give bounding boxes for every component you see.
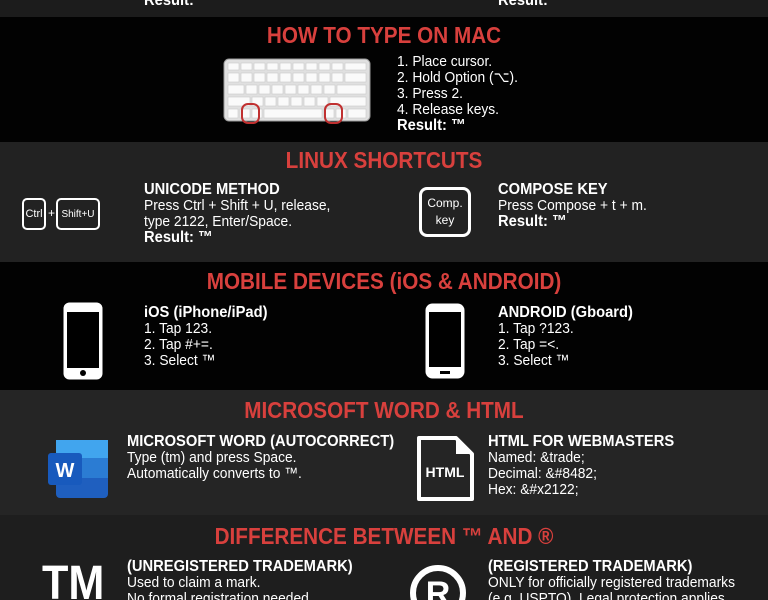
icon: ctrl shift u keys <box>22 198 100 230</box>
band: previous section <box>0 0 768 17</box>
band: mobile <box>0 262 768 390</box>
heading: difference: DIFFERENCE BETWEEN ™ AND ® <box>215 523 553 549</box>
text: compose key <box>498 181 647 230</box>
text: unregistered <box>127 558 353 600</box>
icon: ctrl shift u keys: + <box>48 206 55 220</box>
text: ios <box>144 304 267 369</box>
icon: iphone <box>64 302 102 380</box>
text: android: ANDROID (Gboard) <box>498 304 633 321</box>
text: android: 2. Tap =<. <box>498 336 559 353</box>
text: android: 1. Tap ?123. <box>498 320 574 337</box>
band: word html <box>0 390 768 515</box>
heading: mac: HOW TO TYPE ON MAC <box>267 22 501 48</box>
band: difference <box>0 515 768 600</box>
text: mac steps: 3. Press 2. <box>397 85 463 102</box>
text: unicode method <box>144 181 330 246</box>
band: linux <box>0 142 768 262</box>
heading: word html: MICROSOFT WORD & HTML <box>244 397 524 423</box>
icon: word: W <box>56 460 75 482</box>
text: mac steps: Result: ™ <box>397 117 466 134</box>
text: html entities: Named: &trade; <box>488 449 585 466</box>
icon: ctrl shift u keys: Ctrl <box>25 208 43 220</box>
icon: compose key: Comp. <box>427 196 463 210</box>
text: word autocorrect <box>127 433 394 482</box>
text: registered: ONLY for officially registered trademarks <box>488 574 735 591</box>
text: unicode method: type 2122, Enter/Space. <box>144 213 292 230</box>
icon: R circle <box>410 565 466 600</box>
heading: mobile: MOBILE DEVICES (iOS & ANDROID) <box>207 268 561 294</box>
text: html entities: HTML FOR WEBMASTERS <box>488 433 674 450</box>
text: unregistered: (UNREGISTERED TRADEMARK) <box>127 558 353 575</box>
icon: html file: HTML <box>426 464 465 480</box>
text: ios: 3. Select ™ <box>144 352 215 369</box>
text: mac steps: 1. Place cursor. <box>397 53 492 70</box>
heading: linux: LINUX SHORTCUTS <box>286 147 482 173</box>
text: word autocorrect: Type (tm) and press Space. <box>127 449 297 466</box>
text: mac steps: 2. Hold Option (⌥). <box>397 69 518 86</box>
text: html entities: Hex: &#x2122; <box>488 481 579 498</box>
icon: android phone <box>426 304 464 378</box>
icon: ctrl shift u keys: Shift+U <box>61 208 95 220</box>
text: compose key: Press Compose + t + m. <box>498 197 647 214</box>
text: ios: 2. Tap #+=. <box>144 336 213 353</box>
text: registered <box>488 558 735 600</box>
text: unregistered: Used to claim a mark. <box>127 574 260 591</box>
text: mac steps <box>397 53 518 134</box>
text: ios: 1. Tap 123. <box>144 320 212 337</box>
text: compose key: COMPOSE KEY <box>498 181 608 198</box>
text: android: 3. Select ™ <box>498 352 569 369</box>
text: word autocorrect: Automatically converts to ™. <box>127 465 302 482</box>
text: ios: iOS (iPhone/iPad) <box>144 304 267 321</box>
band: mac <box>0 17 768 142</box>
icon: word <box>48 440 108 498</box>
text: unicode method: Press Ctrl + Shift + U, release, <box>144 197 330 214</box>
text: android <box>498 304 633 369</box>
text: registered: (REGISTERED TRADEMARK) <box>488 558 692 575</box>
text: word autocorrect: MICROSOFT WORD (AUTOCORRECT) <box>127 433 394 450</box>
text: compose key: Result: ™ <box>498 213 567 230</box>
icon: compose key: key <box>436 213 454 227</box>
text: html entities <box>488 433 674 498</box>
text: html entities: Decimal: &#8482; <box>488 465 597 482</box>
text: unicode method: UNICODE METHOD <box>144 181 280 198</box>
text: mac steps: 4. Release keys. <box>397 101 499 118</box>
icon: keyboard <box>224 58 370 124</box>
icon: html file <box>417 436 474 501</box>
icon: compose key <box>419 187 471 237</box>
text: unicode method: Result: ™ <box>144 229 213 246</box>
